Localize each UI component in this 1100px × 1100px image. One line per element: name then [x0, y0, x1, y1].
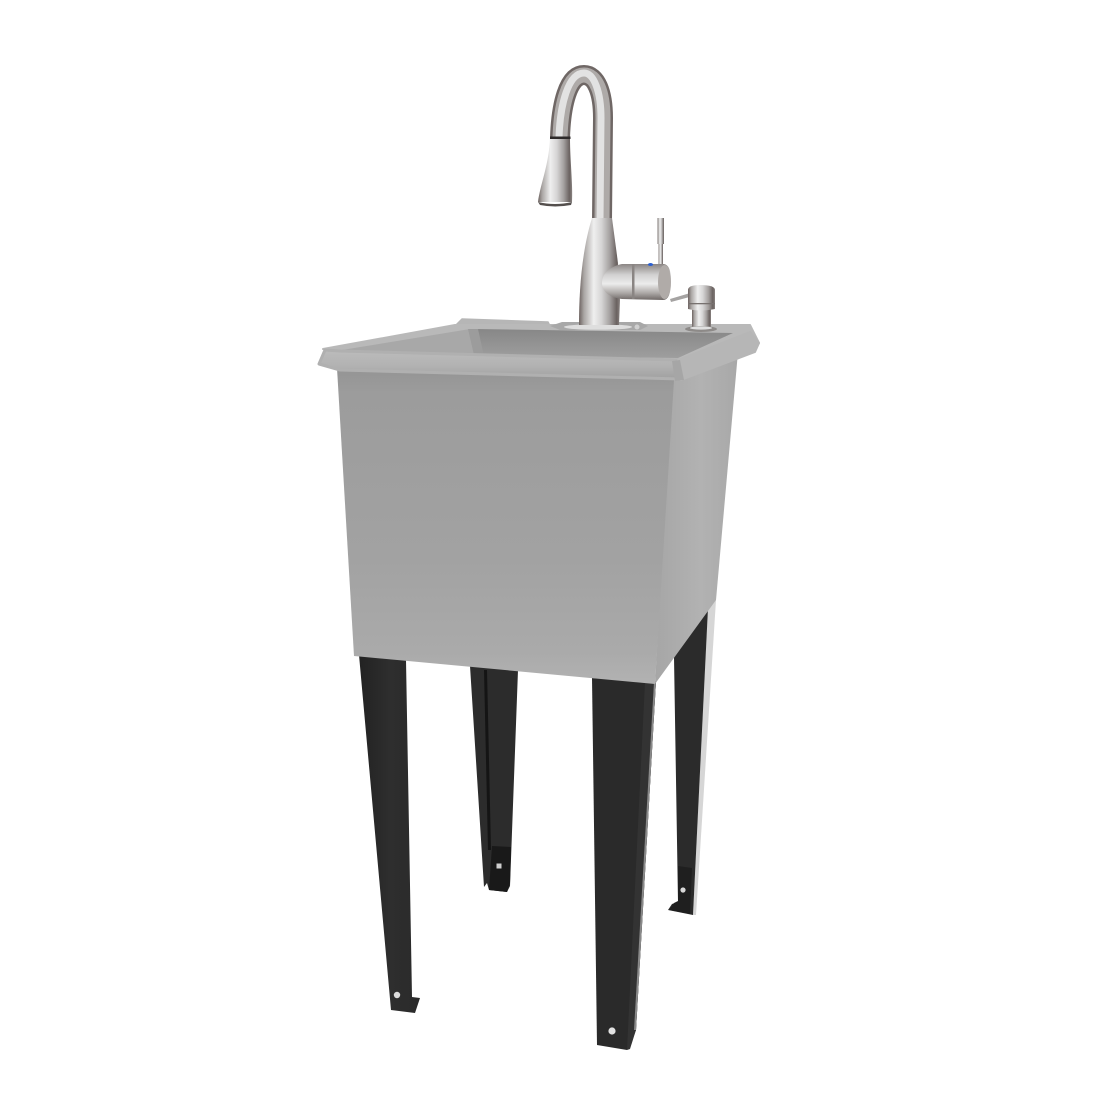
faucet gooseneck spout [559, 73, 603, 220]
blue temperature dot [648, 263, 653, 266]
right rim [678, 332, 759, 380]
front rim [319, 350, 680, 379]
faucet pull-down spray head [538, 138, 572, 202]
front left leg [359, 655, 420, 1013]
soap dispenser [670, 285, 717, 332]
rear right leg [668, 600, 716, 915]
faucet handle lever [658, 218, 664, 268]
rear middle leg [470, 666, 518, 892]
basin inner corner shading [468, 329, 484, 356]
faucet [538, 73, 671, 325]
faucet handle body [602, 264, 671, 300]
sink tub [319, 319, 759, 684]
back rim ledge [455, 319, 552, 330]
tub front panel [337, 368, 674, 684]
top rim deck [323, 325, 759, 362]
faucet tapered base [579, 218, 620, 325]
basin back wall [476, 329, 733, 358]
deck plate [550, 322, 648, 330]
front right leg [592, 678, 656, 1050]
tub side panel [655, 352, 738, 684]
basin left wall [342, 329, 478, 354]
